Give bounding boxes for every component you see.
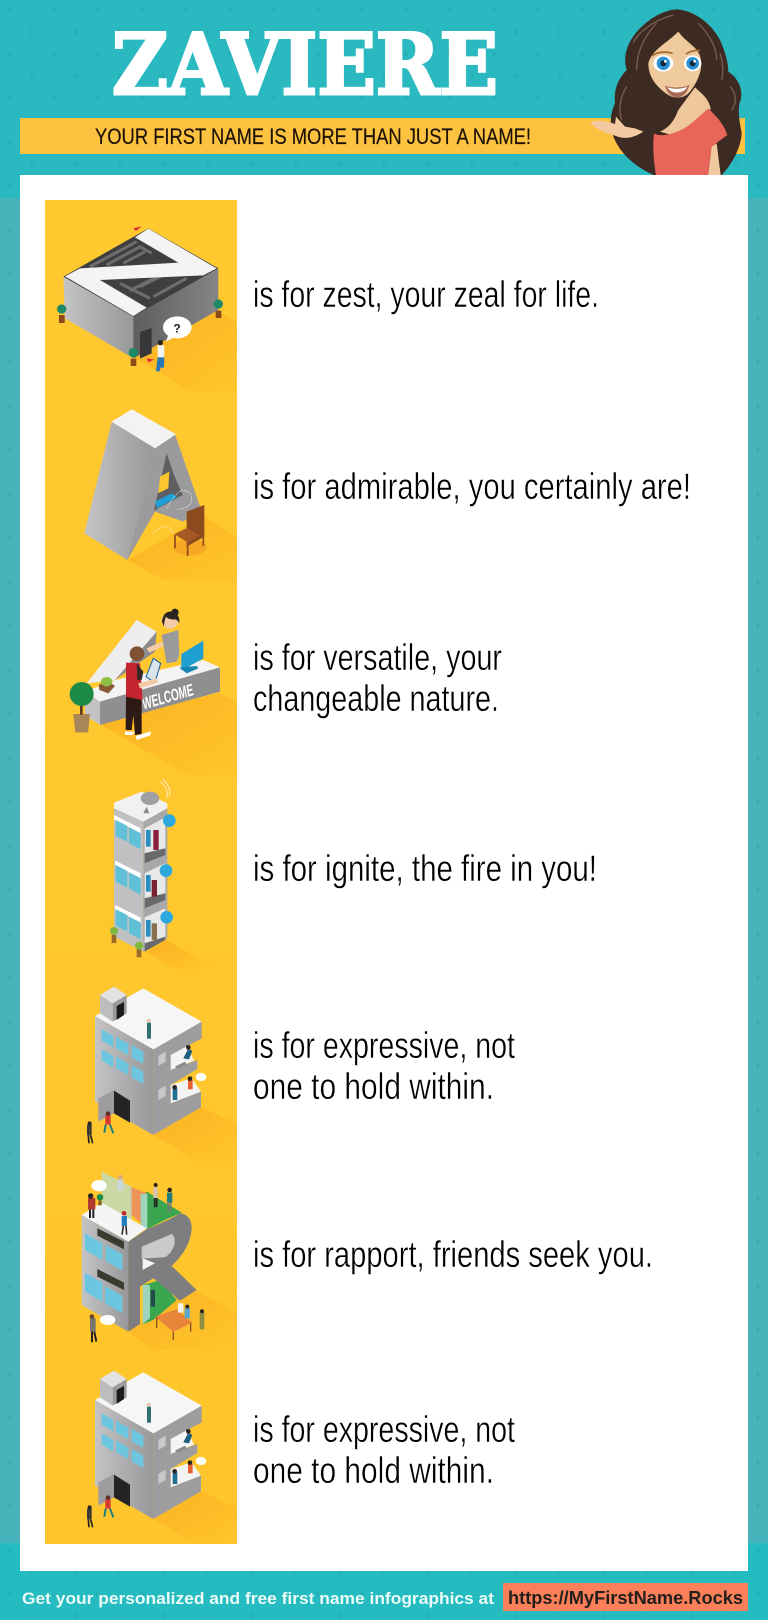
text: E: one to hold within. (253, 1066, 494, 1107)
table (155, 1309, 192, 1340)
illustrations (57, 226, 237, 1545)
text: E repeat: is for expressive, not (253, 1409, 516, 1450)
text: E repeat (253, 1409, 516, 1491)
icon: letter A (84, 409, 237, 580)
text: I: is for ignite, the fire in you! (253, 848, 597, 889)
people on R (88, 1175, 204, 1342)
text: V: changeable nature. (253, 678, 499, 719)
person with question bubble (156, 316, 192, 372)
icon: letter Z maze (57, 226, 237, 392)
monitor (179, 641, 203, 673)
text: V (253, 637, 502, 719)
text: E: is for expressive, not (253, 1025, 516, 1066)
text: E repeat: one to hold within. (253, 1450, 494, 1491)
icon: letter E building (87, 987, 237, 1161)
text: E (253, 1025, 516, 1107)
icon: letter R building (82, 1172, 237, 1350)
welcome sign: WELCOME (140, 680, 196, 713)
icon: letter V reception desk (70, 609, 237, 775)
mascot: woman with long brown hair (590, 9, 742, 175)
footer link (503, 1583, 748, 1611)
banner (20, 118, 745, 154)
text: R: is for rapport, friends seek you. (253, 1234, 653, 1275)
title: ZAVIERE (112, 15, 498, 114)
visitor (125, 646, 161, 740)
potted tree (70, 682, 94, 732)
yellow illustration column (45, 200, 237, 1544)
satellite dish (141, 779, 170, 813)
receptionist (147, 609, 179, 663)
people (87, 1019, 206, 1143)
text: V: is for versatile, your (253, 637, 502, 678)
person with question bubble: ? (173, 322, 181, 336)
footer text: Get your personalized and free first name infographics at (22, 1589, 494, 1608)
tagline: YOUR FIRST NAME IS MORE THAN JUST A NAME! (95, 124, 531, 149)
icon: letter I tower (110, 779, 195, 967)
icon: letter E building repeat (87, 1370, 228, 1534)
footer link: https://MyFirstName.Rocks (508, 1588, 743, 1608)
text: Z: is for zest, your zeal for life. (253, 274, 599, 315)
